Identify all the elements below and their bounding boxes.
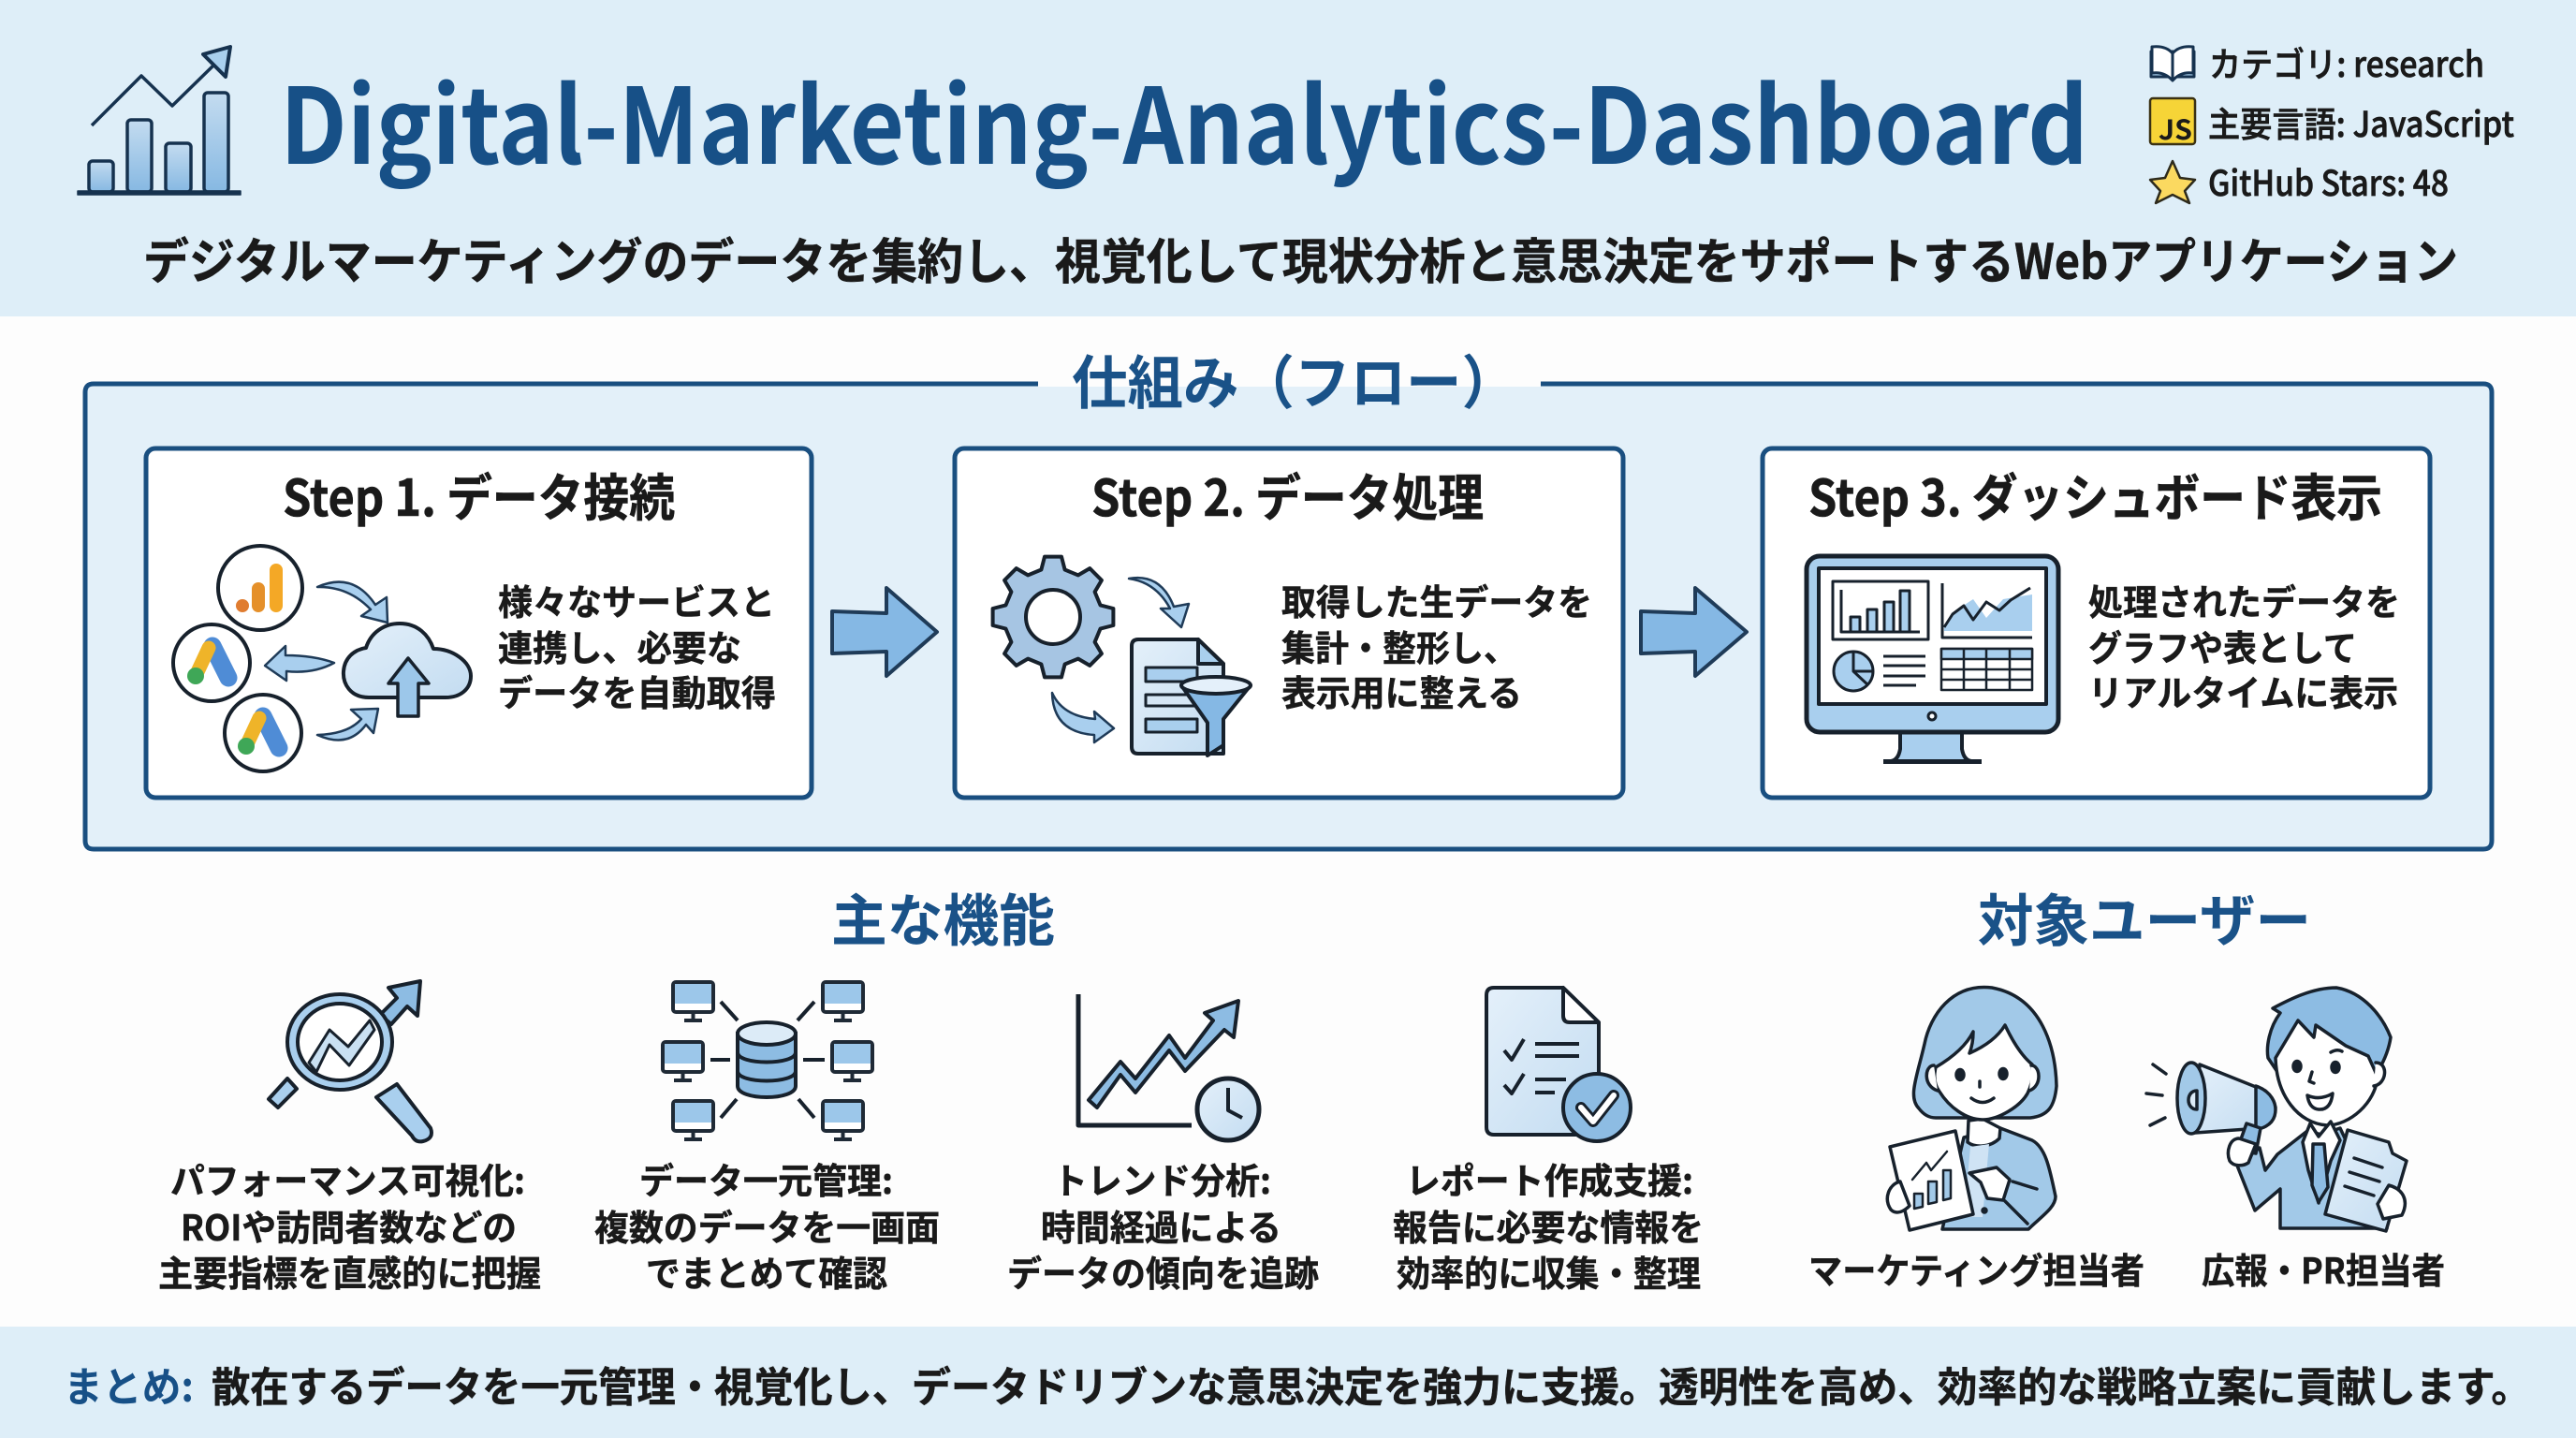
icon: ads circle — [173, 624, 250, 701]
user: PR manager — [2146, 988, 2445, 1294]
icon: gear — [993, 557, 1113, 677]
step 2 description — [1281, 574, 1592, 716]
subtitle: 視覚化して現状分析と意思決定をサポートする — [1055, 223, 2014, 293]
feature 4 text — [1393, 1152, 1704, 1297]
user: marketing manager — [1808, 988, 2144, 1294]
icon: cloud — [344, 624, 471, 716]
icon: rising bar chart logo — [78, 47, 241, 195]
step 3 description: グラフや表として — [2088, 620, 2357, 671]
meta: stars: GitHub Stars: 48 — [2208, 155, 2449, 206]
step 3 description: リアルタイムに表示 — [2088, 665, 2398, 716]
panel: flow — [85, 336, 2492, 849]
icon: man with megaphone — [2146, 988, 2407, 1231]
step 2 title: Step 2. データ処理 — [1091, 457, 1484, 531]
icon: list lines on screen — [1883, 656, 1925, 685]
feature: trend analysis — [1007, 994, 1319, 1297]
feature 3 text: データの傾向を追跡 — [1007, 1245, 1319, 1297]
summary text: 透明性を高め、効率的な戦略立案に貢献します。 — [1659, 1354, 2531, 1414]
flow heading: 仕組み（フロー） — [1072, 336, 1517, 420]
icon: gear and filtered document — [993, 557, 1251, 756]
summary text: 視覚化し、 — [714, 1354, 912, 1414]
arrow: step 2 to step 3 — [1641, 588, 1747, 676]
icon: pie chart on screen — [1834, 652, 1873, 691]
icon: document — [1132, 639, 1223, 754]
feature: data source management — [594, 982, 940, 1297]
feature: performance visualization — [158, 981, 541, 1297]
card: step 3 — [1763, 448, 2430, 798]
feature 3 text — [1007, 1152, 1319, 1297]
meta info list — [2150, 37, 2514, 206]
icon: flow arrows — [265, 582, 388, 740]
step 3 description: 処理されたデータを — [2088, 574, 2400, 625]
icon: trend chart with clock — [1078, 994, 1259, 1140]
icon: magnifier with chart — [269, 981, 432, 1141]
summary text: データドリブンな意思決定を強力に支援。 — [912, 1354, 1659, 1414]
step 1 description: 様々なサービスと — [498, 574, 775, 625]
icon: funnel — [1181, 677, 1251, 756]
feature 2 text: でまとめて確認 — [646, 1245, 887, 1297]
icon: database network — [663, 982, 872, 1139]
feature 4 text: レポート作成支援: — [1406, 1152, 1693, 1204]
summary text: 散在するデータを一元管理・ — [212, 1354, 714, 1414]
heading: main features: 主な機能 — [831, 876, 1055, 958]
step 1 description: 連携し、必要な — [498, 620, 741, 671]
step 3 description — [2088, 574, 2400, 716]
icon: dashboard monitor — [1807, 556, 2058, 764]
meta: category: カテゴリ: research — [2209, 37, 2484, 87]
step 2 description: 取得した生データを — [1281, 574, 1592, 625]
title: Digital-Marketing-Analytics-Dashboard — [280, 43, 2088, 195]
summary text — [212, 1354, 2531, 1414]
feature 4 text: 報告に必要な情報を — [1393, 1199, 1704, 1251]
meta: language: 主要言語: JavaScript — [2208, 96, 2514, 147]
card: step 2 — [955, 448, 1623, 798]
icon: services syncing to cloud — [173, 546, 471, 771]
icon: curved arrows — [1052, 578, 1189, 742]
step 2 description: 集計・整形し、 — [1281, 620, 1517, 671]
header band — [0, 0, 2576, 316]
subtitle: デジタルマーケティングのデータを集約し、 — [143, 223, 1055, 293]
summary label: まとめ: — [64, 1354, 194, 1414]
step 1 description — [498, 574, 776, 716]
icon: line chart on screen — [1942, 583, 2032, 638]
heading: target users: 対象ユーザー — [1978, 876, 2311, 958]
feature 3 text: 時間経過による — [1041, 1199, 1281, 1251]
icon: analytics circle — [218, 546, 302, 630]
step 1 description: データを自動取得 — [498, 665, 776, 716]
feature 2 text — [594, 1152, 940, 1297]
icon: woman with report — [1887, 988, 2056, 1230]
feature 1 text: ROIや訪問者数などの — [181, 1199, 517, 1251]
icon: bar chart on screen — [1833, 581, 1928, 639]
icon: open book — [2151, 47, 2194, 81]
feature 2 text: データ一元管理: — [639, 1152, 893, 1204]
feature 2 text: 複数のデータを一画面 — [594, 1199, 940, 1251]
step 3 title: Step 3. ダッシュボード表示 — [1808, 457, 2382, 531]
subtitle — [143, 223, 2458, 293]
icon: checklist document with badge — [1486, 988, 1631, 1141]
icon: JavaScript badge: JS — [2159, 109, 2192, 148]
step 1 title: Step 1. データ接続 — [283, 457, 675, 531]
subtitle: Webアプリケーション — [2014, 223, 2458, 293]
arrow: step 1 to step 2 — [832, 588, 937, 676]
feature 1 text: パフォーマンス可視化: — [170, 1152, 525, 1204]
feature 1 text — [158, 1152, 541, 1297]
icon: JavaScript badge — [2150, 98, 2195, 148]
icon: ads circle 2 — [225, 695, 301, 771]
feature 1 text: 主要指標を直感的に把握 — [158, 1245, 541, 1297]
feature: report support — [1393, 988, 1704, 1297]
summary band — [0, 1327, 2576, 1438]
step 2 description: 表示用に整える — [1281, 665, 1522, 716]
feature 4 text: 効率的に収集・整理 — [1397, 1245, 1701, 1297]
icon: table on screen — [1941, 649, 2032, 690]
card: step 1 — [146, 448, 812, 798]
feature 3 text: トレンド分析: — [1053, 1152, 1271, 1204]
user 1 label: マーケティング担当者 — [1808, 1242, 2144, 1294]
user 2 label: 広報・PR担当者 — [2202, 1242, 2445, 1294]
icon: star — [2150, 161, 2195, 203]
